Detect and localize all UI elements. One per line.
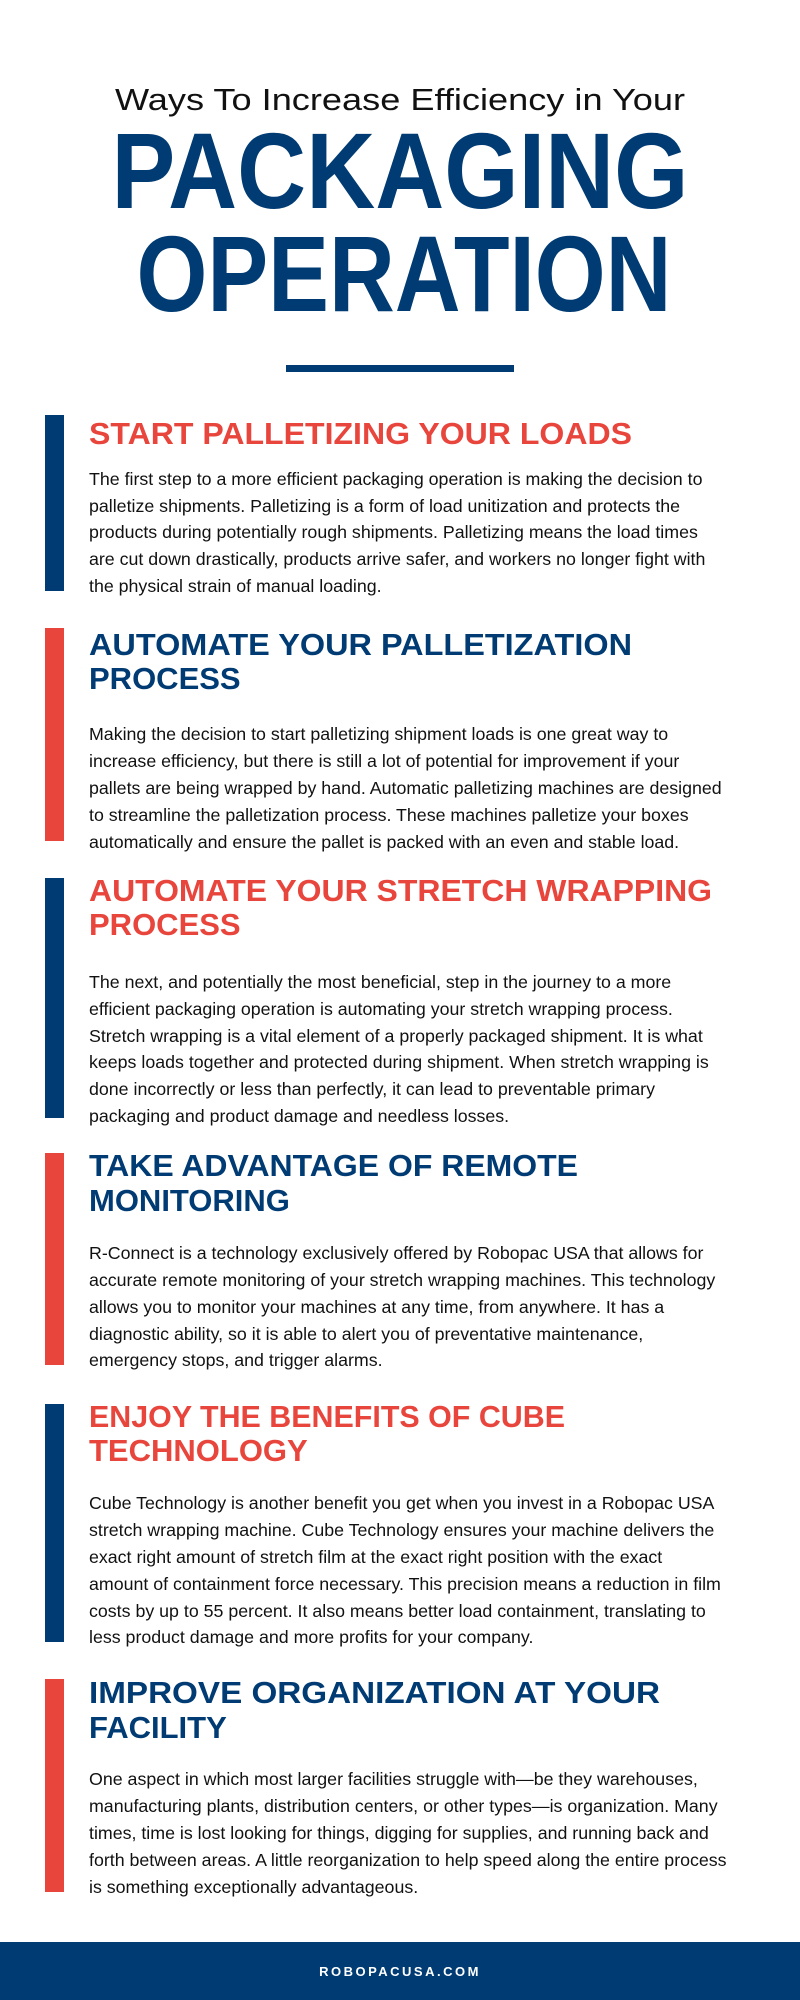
- title: [112, 82, 688, 334]
- panel: automate stretch wrapping: packaging and product damage and needless losses.: [89, 1106, 509, 1126]
- panel: start palletizing: are cut down drastically, products arrive safer, and workers no longer fight with: [89, 549, 705, 569]
- panel: automate palletization: pallets are being wrapped by hand. Automatic palletizing machines are designed: [89, 778, 722, 798]
- panel: automate stretch wrapping: keeps loads together and protected during shipment. When stretch wrapping is: [89, 1052, 709, 1072]
- panel: automate palletization: to streamline the palletization process. These machines palletize your boxes: [89, 805, 689, 825]
- title: OPERATION: [136, 213, 672, 334]
- panel: automate stretch wrapping: [45, 873, 712, 1126]
- panel: cube technology: costs by up to 55 percent. It also means better load containment, translating to: [89, 1601, 706, 1621]
- panel: start palletizing: START PALLETIZING YOUR LOADS: [89, 416, 632, 451]
- panel: automate palletization: increase efficiency, but there is still a lot of potential for improvement if your: [89, 751, 679, 771]
- panel: improve organization: FACILITY: [89, 1710, 227, 1745]
- panel: cube technology: amount of containment force necessary. This precision means a reduction in film: [89, 1574, 721, 1594]
- title: PACKAGING: [112, 110, 688, 231]
- panel: cube technology: ENJOY THE BENEFITS OF CUBE: [89, 1399, 565, 1434]
- panel: improve organization: times, time is lost looking for things, digging for supplies, and running back and: [89, 1823, 709, 1843]
- panel: start palletizing: The first step to a more efficient packaging operation is making the decision to: [89, 469, 703, 489]
- panel: automate stretch wrapping: efficient packaging operation is automating your stretch wrapping process.: [89, 999, 673, 1019]
- panel: start palletizing: palletize shipments. Palletizing is a form of load unitization and protects the: [89, 496, 680, 516]
- panel: cube technology: less product damage and more profits for your company.: [89, 1627, 533, 1647]
- panel: improve organization: forth between areas. A little reorganization to help speed along the entire process: [89, 1850, 727, 1870]
- panel: start palletizing: products during potentially rough shipments. Palletizing means the load times: [89, 522, 698, 542]
- panel: cube technology: TECHNOLOGY: [89, 1433, 308, 1468]
- panel: automate palletization: AUTOMATE YOUR PALLETIZATION: [89, 627, 632, 662]
- panel: improve organization: IMPROVE ORGANIZATION AT YOUR: [89, 1675, 660, 1710]
- panel: cube technology: stretch wrapping machine. Cube Technology ensures your machine delivers the: [89, 1520, 714, 1540]
- panel: automate stretch wrapping: PROCESS: [89, 907, 241, 942]
- panel: cube technology: exact right amount of stretch film at the exact right position with the exact: [89, 1547, 662, 1567]
- panel: automate stretch wrapping: The next, and potentially the most beneficial, step in the journey to a more: [89, 972, 671, 992]
- panel: improve organization: [45, 1675, 727, 1897]
- panel: remote monitoring: TAKE ADVANTAGE OF REMOTE: [89, 1148, 578, 1183]
- panel: remote monitoring: emergency stops, and trigger alarms.: [89, 1350, 383, 1370]
- panel: remote monitoring: diagnostic ability, so it is able to alert you of preventative maintenance,: [89, 1324, 643, 1344]
- panel: automate palletization: automatically and ensure the pallet is packed with an even and stable load.: [89, 832, 679, 852]
- panel: improve organization: is something exceptionally advantageous.: [89, 1877, 418, 1897]
- panel: start palletizing: [45, 415, 705, 596]
- panel: automate stretch wrapping: AUTOMATE YOUR STRETCH WRAPPING: [89, 873, 712, 908]
- panel: cube technology: Cube Technology is another benefit you get when you invest in a Robopac USA: [89, 1493, 715, 1513]
- panel: improve organization: manufacturing plants, distribution centers, or other types—is organization. Many: [89, 1796, 718, 1816]
- panel: cube technology: [45, 1399, 721, 1647]
- panel: remote monitoring: accurate remote monitoring of your stretch wrapping machines. This technology: [89, 1270, 715, 1290]
- panel: remote monitoring: [45, 1148, 715, 1370]
- panel: start palletizing: the physical strain of manual loading.: [89, 576, 382, 596]
- panel: automate stretch wrapping: done incorrectly or less than perfectly, it can lead to preventable primary: [89, 1079, 655, 1099]
- panel: remote monitoring: MONITORING: [89, 1183, 290, 1218]
- panel: automate stretch wrapping: Stretch wrapping is a vital element of a properly packaged shipment. It is what: [89, 1026, 703, 1046]
- panel: remote monitoring: allows you to monitor your machines at any time, from anywhere. It has a: [89, 1297, 664, 1317]
- title: Ways To Increase Efficiency in Your: [115, 82, 685, 117]
- panel: automate palletization: Making the decision to start palletizing shipment loads is one great way to: [89, 724, 668, 744]
- panel: automate palletization: [45, 627, 722, 852]
- panel: automate palletization: PROCESS: [89, 661, 241, 696]
- panel: remote monitoring: R-Connect is a technology exclusively offered by Robopac USA that allows for: [89, 1243, 704, 1263]
- footer: ROBOPACUSA.COM: [319, 1964, 481, 1979]
- footer: [0, 1942, 800, 2000]
- panel: improve organization: One aspect in which most larger facilities struggle with—be they warehouses,: [89, 1769, 698, 1789]
